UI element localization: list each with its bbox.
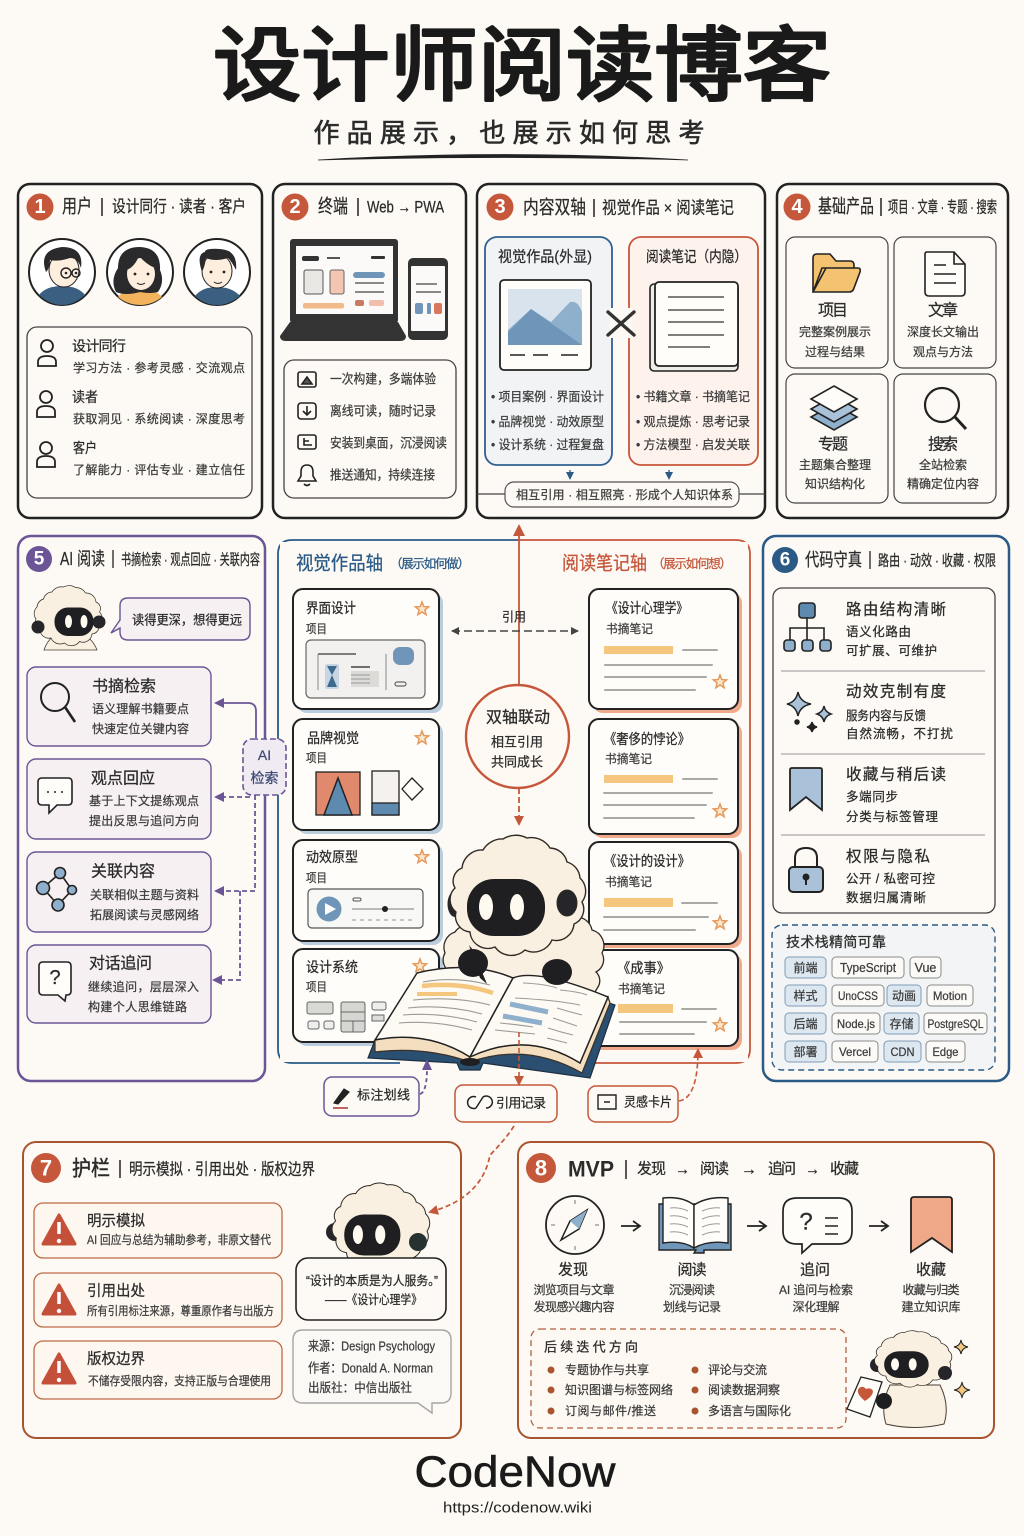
heart card	[847, 1377, 882, 1417]
tag: annotation: 标注划线	[357, 1088, 410, 1102]
tech stack: 技术栈精简可靠	[786, 934, 886, 950]
icon: cross	[608, 308, 634, 338]
capability text: 一次构建，多端体验	[330, 372, 436, 386]
badge 6: 6	[780, 550, 790, 570]
card: linked content	[27, 852, 211, 932]
sparkles	[954, 1340, 970, 1398]
card: motion prototype	[293, 840, 443, 945]
heading 1	[62, 196, 246, 218]
card: search: 全站检索	[919, 457, 967, 472]
capability text	[330, 372, 447, 482]
tag: annotation	[324, 1077, 419, 1116]
icon: document stack	[650, 282, 738, 371]
heading 1: 用户	[62, 196, 92, 218]
card: brand visual	[293, 719, 443, 834]
badge 1: 1	[34, 196, 46, 218]
avatar: reader	[107, 239, 173, 305]
text: bookmarks: 收藏与稍后读	[846, 766, 946, 784]
step: discover: 发现感兴趣内容	[534, 1299, 614, 1314]
tag: citation record: 引用记录	[496, 1096, 546, 1110]
card: explicit simulation: AI 回应与总结为辅助参考，非原文替代	[87, 1232, 271, 1247]
title: 设计师阅读博客	[213, 22, 831, 112]
heading 7: 明示模拟 · 引用出处 · 版权边界	[129, 1160, 315, 1178]
card: linked content: 关联内容	[91, 862, 155, 880]
card: design of design note: 书摘笔记	[605, 874, 652, 889]
heading 4: 基础产品	[818, 196, 874, 218]
arrow: axis up	[513, 524, 525, 686]
card: design of design note	[589, 842, 742, 948]
icon: warning	[43, 1285, 75, 1314]
step: save: 收藏	[916, 1262, 946, 1278]
card: topics: 专题	[818, 436, 848, 454]
text: routing: 语义化路由	[846, 624, 911, 639]
pen	[469, 945, 487, 984]
step: save: 收藏与归类	[902, 1283, 960, 1297]
card: design of design note: 《设计的设计》	[604, 853, 690, 869]
arrow	[747, 1221, 766, 1231]
quote box: “设计的本质是为人服务。”	[306, 1273, 438, 1288]
card: reading notes	[629, 237, 758, 465]
heading 8: MVP	[568, 1156, 614, 1182]
step: discover: 浏览项目与文章	[534, 1282, 614, 1297]
capability text: 离线可读，随时记录	[330, 404, 436, 418]
badge 3	[486, 194, 514, 220]
icon: network	[36, 868, 76, 911]
audience text: 了解能力 · 评估专业 · 建立信任	[73, 462, 245, 477]
quote box: ——《设计心理学》	[325, 1292, 422, 1307]
step: ask: 深化理解	[792, 1300, 840, 1314]
roadmap items	[565, 1362, 791, 1418]
card: articles: 文章	[928, 302, 958, 320]
quote box	[296, 1258, 446, 1320]
badge 7: 7	[40, 1156, 52, 1180]
source bubble	[293, 1330, 451, 1413]
panel 2: devices	[273, 184, 466, 518]
card: brand visual: 项目	[306, 751, 327, 765]
card: citation source	[34, 1273, 282, 1327]
card: projects	[786, 237, 888, 368]
roadmap items: 阅读数据洞察	[708, 1382, 780, 1397]
roadmap box	[531, 1329, 846, 1428]
chips row 4: 部署	[794, 1044, 818, 1059]
heading 3: 内容双轴	[523, 196, 586, 218]
icon: person	[37, 340, 56, 467]
panel: dual axis frame	[278, 524, 750, 1122]
icon: magnifier	[41, 683, 75, 722]
card: UI design: 项目	[306, 622, 327, 636]
label: citation arrow	[452, 610, 578, 631]
card: explicit simulation: 明示模拟	[87, 1212, 145, 1230]
roadmap items: 知识图谱与标签网络	[565, 1382, 673, 1397]
text: privacy: 公开 / 私密可控	[846, 871, 935, 886]
mascot: small sheep	[32, 586, 106, 650]
roadmap items: 多语言与国际化	[708, 1404, 791, 1418]
icon: open book	[659, 1198, 731, 1253]
text: bookmarks: 多端同步	[846, 790, 898, 804]
audience list	[27, 327, 252, 498]
card: reading notes: 阅读笔记（内隐）	[646, 248, 747, 266]
card: affluence paradox note	[589, 719, 742, 838]
heading: visual axis	[296, 552, 470, 574]
arrows to summary	[570, 470, 669, 478]
arrow: citation to guardrail mascot	[430, 1126, 514, 1212]
text: routing	[846, 600, 946, 658]
badge 5	[26, 546, 52, 572]
chips row 4	[785, 1041, 965, 1062]
audience text: 学习方法 · 参考灵感 · 交流观点	[73, 360, 245, 375]
heading 7: 护栏	[72, 1158, 110, 1180]
card: design system: 项目	[306, 980, 327, 994]
icon: sparkles	[787, 692, 831, 732]
audience text: 客户	[73, 440, 97, 456]
chips row 4: CDN	[890, 1045, 914, 1059]
footer url: https://codenow.wiki	[443, 1500, 592, 1516]
arrow: circle to mascot	[518, 788, 520, 824]
step: read: 阅读	[678, 1262, 706, 1278]
arrow: book to citation	[518, 1032, 520, 1084]
icon: layers	[811, 386, 857, 430]
card: viewpoint response: 观点回应	[91, 768, 155, 788]
panel 5: AI reading	[18, 536, 265, 1081]
badge: AI search: AI	[258, 747, 271, 763]
capability text: 推送通知，持续连接	[330, 468, 435, 482]
arrow	[869, 1221, 888, 1231]
tech stack	[772, 925, 995, 1070]
visual bullets: • 项目案例 · 界面设计	[491, 389, 604, 404]
speech bubble	[111, 598, 250, 640]
visual bullets: • 设计系统 · 过程复盘	[491, 437, 604, 452]
heading: reading axis	[562, 552, 732, 574]
card: viewpoint response	[27, 759, 211, 839]
text: motion: 自然流畅，不打扰	[846, 726, 953, 741]
notes bullets	[636, 389, 750, 452]
roadmap items: 订阅与邮件/推送	[565, 1403, 656, 1418]
callout: dual axis link: 双轴联动	[486, 708, 550, 726]
audience text: 设计同行	[72, 338, 126, 354]
heading 6: 代码守真	[805, 550, 862, 570]
heading 5: AI 阅读	[60, 549, 105, 569]
step: discover	[534, 1196, 614, 1314]
card: follow-up dialogue: 继续追问，层层深入	[88, 979, 199, 994]
heading 6	[805, 550, 996, 570]
text: motion: 动效克制有度	[846, 682, 946, 700]
card: copyright boundary	[34, 1341, 282, 1399]
notes bullets: • 方法模型 · 启发关联	[636, 437, 750, 452]
badge 7	[31, 1153, 61, 1183]
icon: question bubble: ?	[49, 967, 61, 989]
heading 3	[523, 196, 734, 218]
badge: AI search: 检索	[250, 770, 278, 786]
card: design of everyday things note: 《设计心理学》	[606, 600, 688, 616]
chips row 3: 后端	[794, 1017, 818, 1031]
icon: picture frame	[500, 280, 591, 370]
badge 4	[784, 194, 810, 220]
heading: reading axis: 阅读笔记轴	[562, 552, 647, 574]
card: articles: 深度长文输出	[907, 324, 979, 339]
step: discover: 发现	[558, 1262, 588, 1278]
icon: warning	[43, 1354, 75, 1383]
chips row 2	[785, 985, 973, 1006]
icon: bookmark	[911, 1197, 952, 1252]
icon: document	[925, 252, 965, 296]
card: follow-up dialogue: 构建个人思维链路	[88, 999, 187, 1014]
subtitle: 作品展示，也展示如何思考	[314, 118, 704, 148]
icon: folder	[813, 254, 860, 292]
panel 3: dual content axis	[477, 184, 765, 518]
mock: components	[307, 1002, 386, 1032]
tag: citation record	[455, 1085, 557, 1122]
chips row 3: PostgreSQL	[928, 1017, 984, 1031]
heading 2: 终端	[318, 196, 348, 218]
heading 2: Web → PWA	[367, 198, 445, 216]
arrow	[621, 1221, 640, 1231]
capability list	[284, 360, 456, 498]
summary pill: 相互引用 · 相互照亮 · 形成个人知识体系	[516, 487, 733, 502]
heading: visual axis: （展示如何做）	[390, 556, 470, 571]
icon: phone	[408, 258, 448, 340]
card: linked content: 拓展阅读与灵感网络	[90, 907, 199, 922]
chips row 4: Vercel	[839, 1045, 871, 1059]
roadmap bullets	[548, 1366, 698, 1414]
chips row 1	[785, 957, 941, 978]
step: ask: 追问	[800, 1262, 830, 1278]
card: affluence paradox note: 《奢侈的悖论》	[604, 731, 690, 747]
chips row 1: 前端	[794, 960, 818, 975]
mascot: sheep with quote	[326, 1183, 430, 1269]
hands	[458, 949, 572, 985]
visual bullets: • 品牌视觉 · 动效原型	[491, 414, 604, 429]
icon: lock	[789, 848, 823, 892]
heading 8: 阅读	[700, 1160, 729, 1178]
icon: warning	[43, 1215, 75, 1244]
icon: laptop	[280, 239, 406, 341]
speech bubble: 读得更深，想得更远	[132, 612, 242, 628]
open book	[368, 968, 615, 1078]
avatar: client	[184, 239, 250, 305]
panel 6: code integrity	[763, 536, 1009, 1081]
notes bullets: • 观点提炼 · 思考记录	[636, 414, 750, 429]
avatar: designer peer with glasses	[29, 239, 95, 305]
card: motion prototype: 动效原型	[306, 849, 358, 865]
chips row 3	[785, 1013, 987, 1034]
card: topics	[786, 374, 888, 503]
heading: visual axis: 视觉作品轴	[296, 552, 383, 574]
mock: brand shapes	[316, 771, 423, 815]
summary pill	[477, 482, 765, 507]
roadmap items: 评论与交流	[708, 1362, 767, 1377]
card: citation source: 所有引用标注来源，尊重原作者与出版方	[87, 1303, 274, 1318]
heading 7	[72, 1158, 315, 1180]
callout: dual axis link: 共同成长	[491, 754, 543, 770]
text: motion: 服务内容与反馈	[846, 708, 926, 723]
card: articles: 观点与方法	[913, 344, 973, 359]
card: follow-up dialogue: 对话追问	[89, 954, 152, 972]
text: privacy	[846, 848, 935, 905]
card: excerpt search: 语义理解书籍要点	[92, 701, 189, 716]
card: excerpt search: 快速定位关键内容	[92, 721, 189, 736]
card: brand visual: 品牌视觉	[307, 730, 359, 746]
step: save: 建立知识库	[902, 1299, 960, 1314]
card: affluence paradox note: 书摘笔记	[605, 751, 652, 766]
tag: inspiration card	[588, 1086, 678, 1122]
panel 1: users	[18, 184, 262, 518]
card: projects: 过程与结果	[805, 344, 865, 359]
card: projects: 项目	[818, 302, 848, 320]
step: ask	[779, 1198, 853, 1314]
text: privacy: 权限与隐私	[846, 848, 930, 866]
heading 8: →	[805, 1160, 820, 1178]
card: getting things done note: 《成事》	[617, 960, 670, 976]
panel 8: MVP	[518, 1142, 994, 1438]
card: viewpoint response: 基于上下文提练观点	[89, 793, 199, 808]
card: visual works: 视觉作品(外显)	[498, 248, 592, 266]
panel 4: foundation product	[777, 184, 1008, 518]
icon: compass	[546, 1196, 604, 1254]
chips row 3: Node.js	[837, 1017, 875, 1031]
badge: AI search	[243, 739, 286, 795]
card: projects: 完整案例展示	[799, 324, 871, 339]
text: motion	[846, 682, 953, 741]
chips row 2: 样式	[794, 988, 818, 1003]
icon: magnifier	[925, 388, 966, 429]
step: save	[902, 1197, 960, 1314]
text: privacy: 数据归属清晰	[846, 890, 926, 905]
step: ask: AI 追问与检索	[779, 1282, 853, 1297]
card: visual works	[485, 237, 612, 465]
heading 1: 设计同行 · 读者 · 客户	[112, 197, 246, 216]
card: explicit simulation	[34, 1203, 282, 1258]
card: getting things done note	[589, 950, 742, 1050]
label: citation arrow: 引用	[502, 610, 526, 624]
card: getting things done note: 书摘笔记	[618, 981, 665, 996]
text: bookmarks: 分类与标签管理	[846, 809, 938, 824]
chips row 2: UnoCSS	[838, 989, 878, 1003]
icon: question bubble: ?	[799, 1208, 813, 1236]
chips row 4: Edge	[932, 1045, 959, 1059]
heading 4	[818, 196, 997, 218]
card: copyright boundary: 版权边界	[87, 1350, 145, 1368]
roadmap box: 后续迭代方向	[544, 1340, 638, 1354]
callout: dual axis link	[466, 685, 569, 788]
heading 5	[60, 549, 260, 569]
source bubble: 作者：Donald A. Norman	[308, 1360, 433, 1376]
step: read	[659, 1198, 731, 1314]
icons: capabilities	[298, 372, 316, 486]
card: search	[894, 374, 996, 503]
footer logo: CodeNow	[414, 1448, 616, 1496]
notes bullets: • 书籍文章 · 书摘笔记	[636, 389, 750, 404]
panel 7: guardrails	[23, 1142, 461, 1438]
badge 6	[772, 547, 798, 573]
card: design system	[293, 949, 443, 1046]
audience text: 获取洞见 · 系统阅读 · 深度思考	[73, 411, 245, 426]
chips row 2: Motion	[933, 989, 967, 1003]
card: design of everyday things note: 书摘笔记	[606, 621, 653, 636]
card: search: 精确定位内容	[907, 476, 979, 491]
text: routing: 路由结构清晰	[846, 600, 946, 618]
chips row 3: 存储	[890, 1016, 914, 1031]
card: topics: 知识结构化	[805, 476, 865, 491]
heading 8: →	[675, 1160, 690, 1178]
mock: web layout	[306, 640, 425, 698]
card: design system: 设计系统	[306, 959, 358, 975]
icon: bookmark	[790, 768, 822, 810]
card: design of everyday things note	[589, 589, 742, 713]
arrow: card to notes	[679, 1050, 698, 1101]
heading 8: 收藏	[830, 1160, 859, 1178]
mock: player	[308, 889, 423, 928]
badge 8	[526, 1153, 556, 1183]
heading 8: 追问	[768, 1160, 796, 1178]
icon: chat bubble	[38, 778, 72, 813]
card: UI design: 界面设计	[306, 600, 356, 616]
badge 5: 5	[34, 548, 45, 570]
connector group: AI search arrows	[220, 703, 256, 980]
icon: route tree	[784, 603, 831, 651]
icon: question bubble	[39, 962, 71, 1001]
chips row 1: Vue	[915, 961, 936, 975]
heading 8	[568, 1156, 859, 1182]
card: copyright boundary: 不储存受限内容，支持正版与合理使用	[88, 1373, 271, 1388]
chips row 2: 动画	[892, 989, 916, 1003]
card: articles	[894, 237, 996, 368]
audience text: 读者	[72, 389, 98, 405]
card: excerpt search: 书摘检索	[92, 678, 156, 696]
heading 8: →	[741, 1160, 757, 1178]
badge 2: 2	[289, 196, 301, 218]
callout: dual axis link: 相互引用	[491, 734, 543, 750]
badge 8: 8	[535, 1156, 547, 1180]
card: search: 搜索	[928, 436, 958, 454]
card: UI design	[293, 589, 443, 713]
card: linked content: 关联相似主题与资料	[90, 888, 199, 902]
step: read: 沉浸阅读	[669, 1283, 715, 1297]
text: routing: 可扩展、可维护	[846, 644, 937, 658]
source bubble: 出版社：中信出版社	[308, 1380, 412, 1395]
card: excerpt search	[27, 667, 211, 746]
card: follow-up dialogue	[27, 945, 211, 1023]
heading 8: 发现	[637, 1160, 666, 1178]
badge 1	[26, 194, 54, 220]
badge 2	[282, 194, 308, 220]
capability text: 安装到桌面，沉浸阅读	[330, 436, 447, 450]
badge 3: 3	[494, 196, 506, 218]
mascot: sheep with card	[847, 1331, 970, 1428]
tag: inspiration card: 灵感卡片	[624, 1094, 672, 1110]
heading 2	[318, 196, 445, 218]
visual bullets	[491, 389, 604, 452]
source bubble: 来源：Design Psychology	[308, 1338, 435, 1354]
text: bookmarks	[846, 766, 946, 824]
card: motion prototype: 项目	[306, 871, 327, 885]
card: topics: 主题集合整理	[799, 457, 871, 472]
heading: reading axis: （展示如何想）	[652, 556, 732, 571]
mascot: sheep reading	[368, 835, 615, 1078]
arrow: annotation to book	[420, 1059, 432, 1094]
badge 4: 4	[791, 196, 803, 218]
heading 3: 视觉作品 × 阅读笔记	[602, 198, 734, 218]
heading 5: 书摘检索 · 观点回应 · 关联内容	[121, 550, 260, 568]
card: citation source: 引用出处	[87, 1282, 145, 1300]
audience text	[72, 338, 245, 477]
chips row 1: TypeScript	[840, 961, 896, 975]
card: viewpoint response: 提出反思与追问方向	[89, 813, 199, 828]
step: read: 划线与记录	[663, 1300, 721, 1314]
list: engineering qualities	[773, 588, 995, 913]
roadmap items: 专题协作与共享	[565, 1362, 649, 1377]
